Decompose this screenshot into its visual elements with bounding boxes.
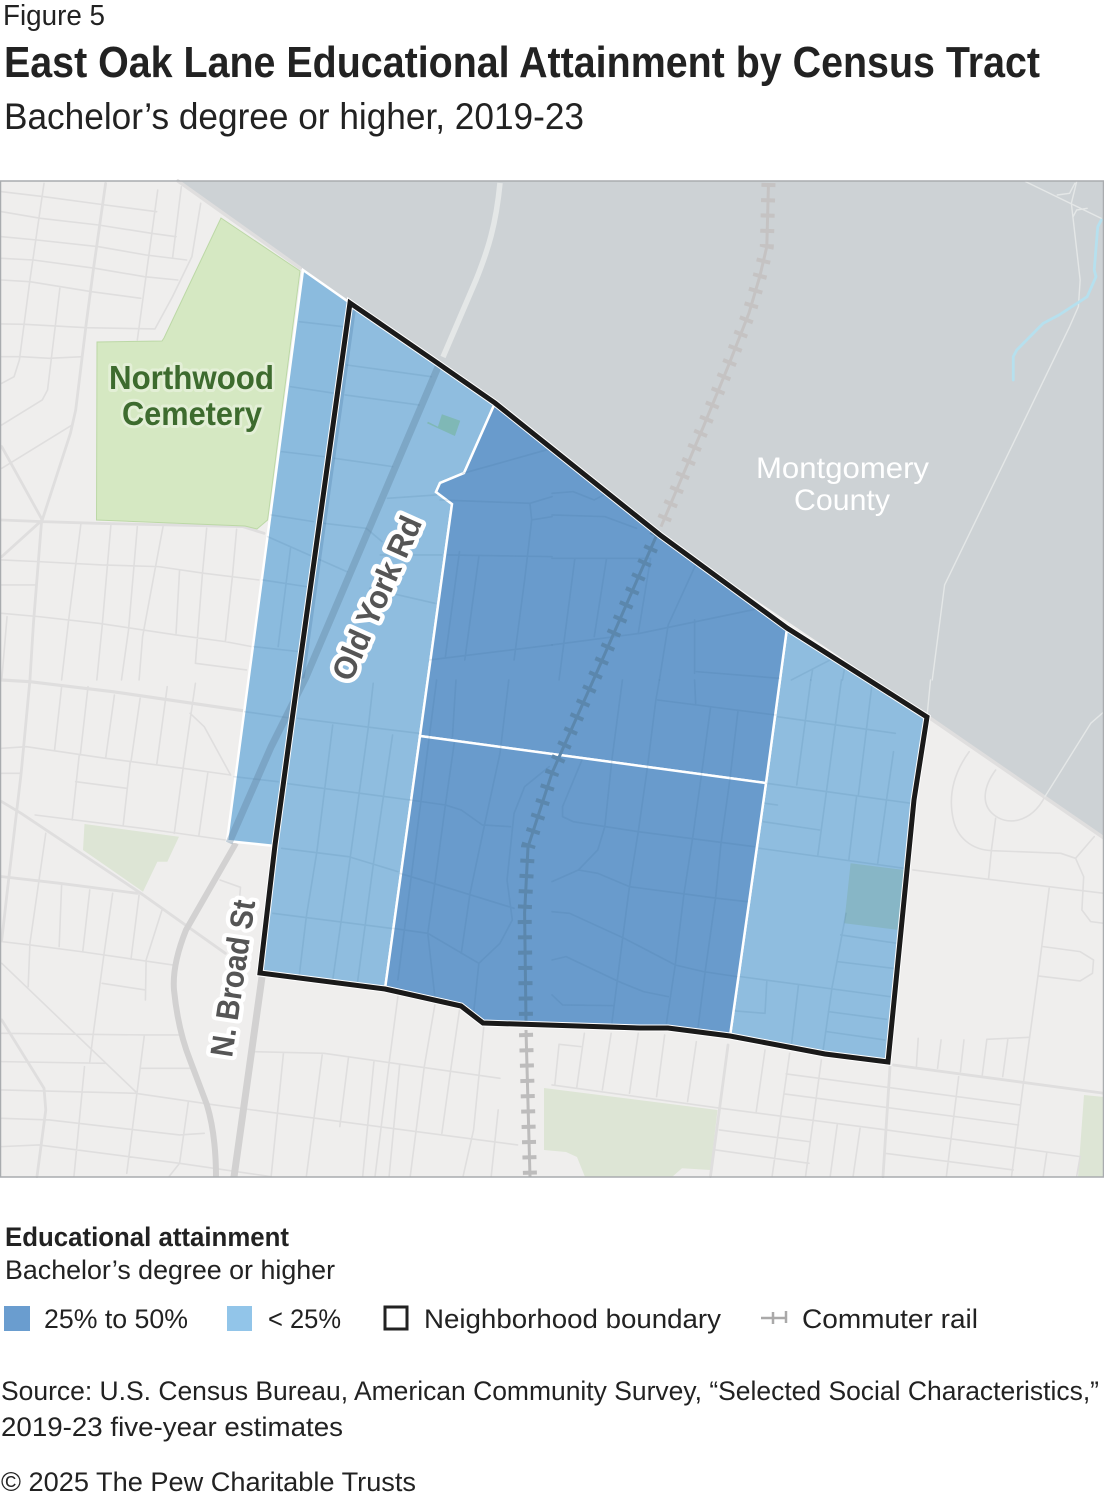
neighborhood boundary [260,303,927,1062]
tract streets northeast [552,492,844,680]
streets southeast [552,752,1104,1177]
label: N. Broad St: N. Broad St [203,897,262,1059]
county highway north of Old York Rd [443,183,500,357]
copyright: © 2025 The Pew Charitable Trusts [1,1467,416,1497]
census tract west (< 25%) [260,303,495,989]
label: Montgomery County: County [794,484,890,517]
label: Montgomery County: Montgomery [756,452,929,485]
main streets northwest [2,183,264,680]
tract streets southwest [234,680,549,1013]
commuter rail south [526,1030,530,1177]
label: Old York Rd: Old York Rd [325,510,429,686]
legend subheading: Bachelor’s degree or higher [5,1255,335,1285]
county road southeast [927,680,1104,797]
main streets southwest [2,680,243,1177]
parks within tracts [427,414,904,930]
census tract outside boundary (< 25%) [227,270,350,846]
parks outside the cemetery [83,824,1104,1177]
map panel [0,181,1104,1177]
label: Northwood Cemetery: Cemetery [122,395,263,432]
legend item: neighborhood boundary: Neighborhood boundary [424,1304,722,1334]
legend item: 25% to 50%: 25% to 50% [44,1304,188,1334]
N. Broad St curving road [174,843,236,1177]
legend item: less than 25%: < 25% [268,1304,341,1334]
census tract east (< 25%) [730,628,927,1062]
Montgomery County area [178,181,1104,838]
map border [0,181,1104,1177]
source note: Source: U.S. Census Bureau, American Community Survey, “Selected Social Characteristics,” [1,1376,1099,1406]
county roads [932,182,1101,680]
label: Montgomery County [756,452,929,517]
commuter rail in tracts [525,533,658,1022]
main streets southeast [710,1045,1104,1177]
subtitle: Bachelor’s degree or higher, 2019-23 [4,96,584,137]
Old York Rd road segment [229,367,438,843]
label: Northwood Cemetery: Northwood [109,359,274,396]
creek [1013,220,1101,380]
streets northwest [2,183,259,680]
commuter rail north [661,183,768,527]
census tract south (25% to 50%) [385,736,766,1036]
cemetery area [96,218,300,529]
label: Northwood Cemetery [109,359,274,432]
tract streets southeast [552,680,911,1050]
source note: 2019-23 five-year estimates [1,1412,343,1442]
legend [4,1222,978,1334]
N. Broad St straight road [234,977,262,1177]
figure label: Figure 5 [3,0,105,32]
boundary road along county line [178,181,1104,838]
streets southwest [2,683,518,1177]
legend heading: Educational attainment [5,1222,289,1252]
legend item: commuter rail: Commuter rail [802,1304,978,1334]
census tract north (25% to 50%) [420,403,787,783]
tract streets north [254,310,552,677]
source note [1,1376,1099,1442]
legend item: less than 25% [227,1304,341,1334]
